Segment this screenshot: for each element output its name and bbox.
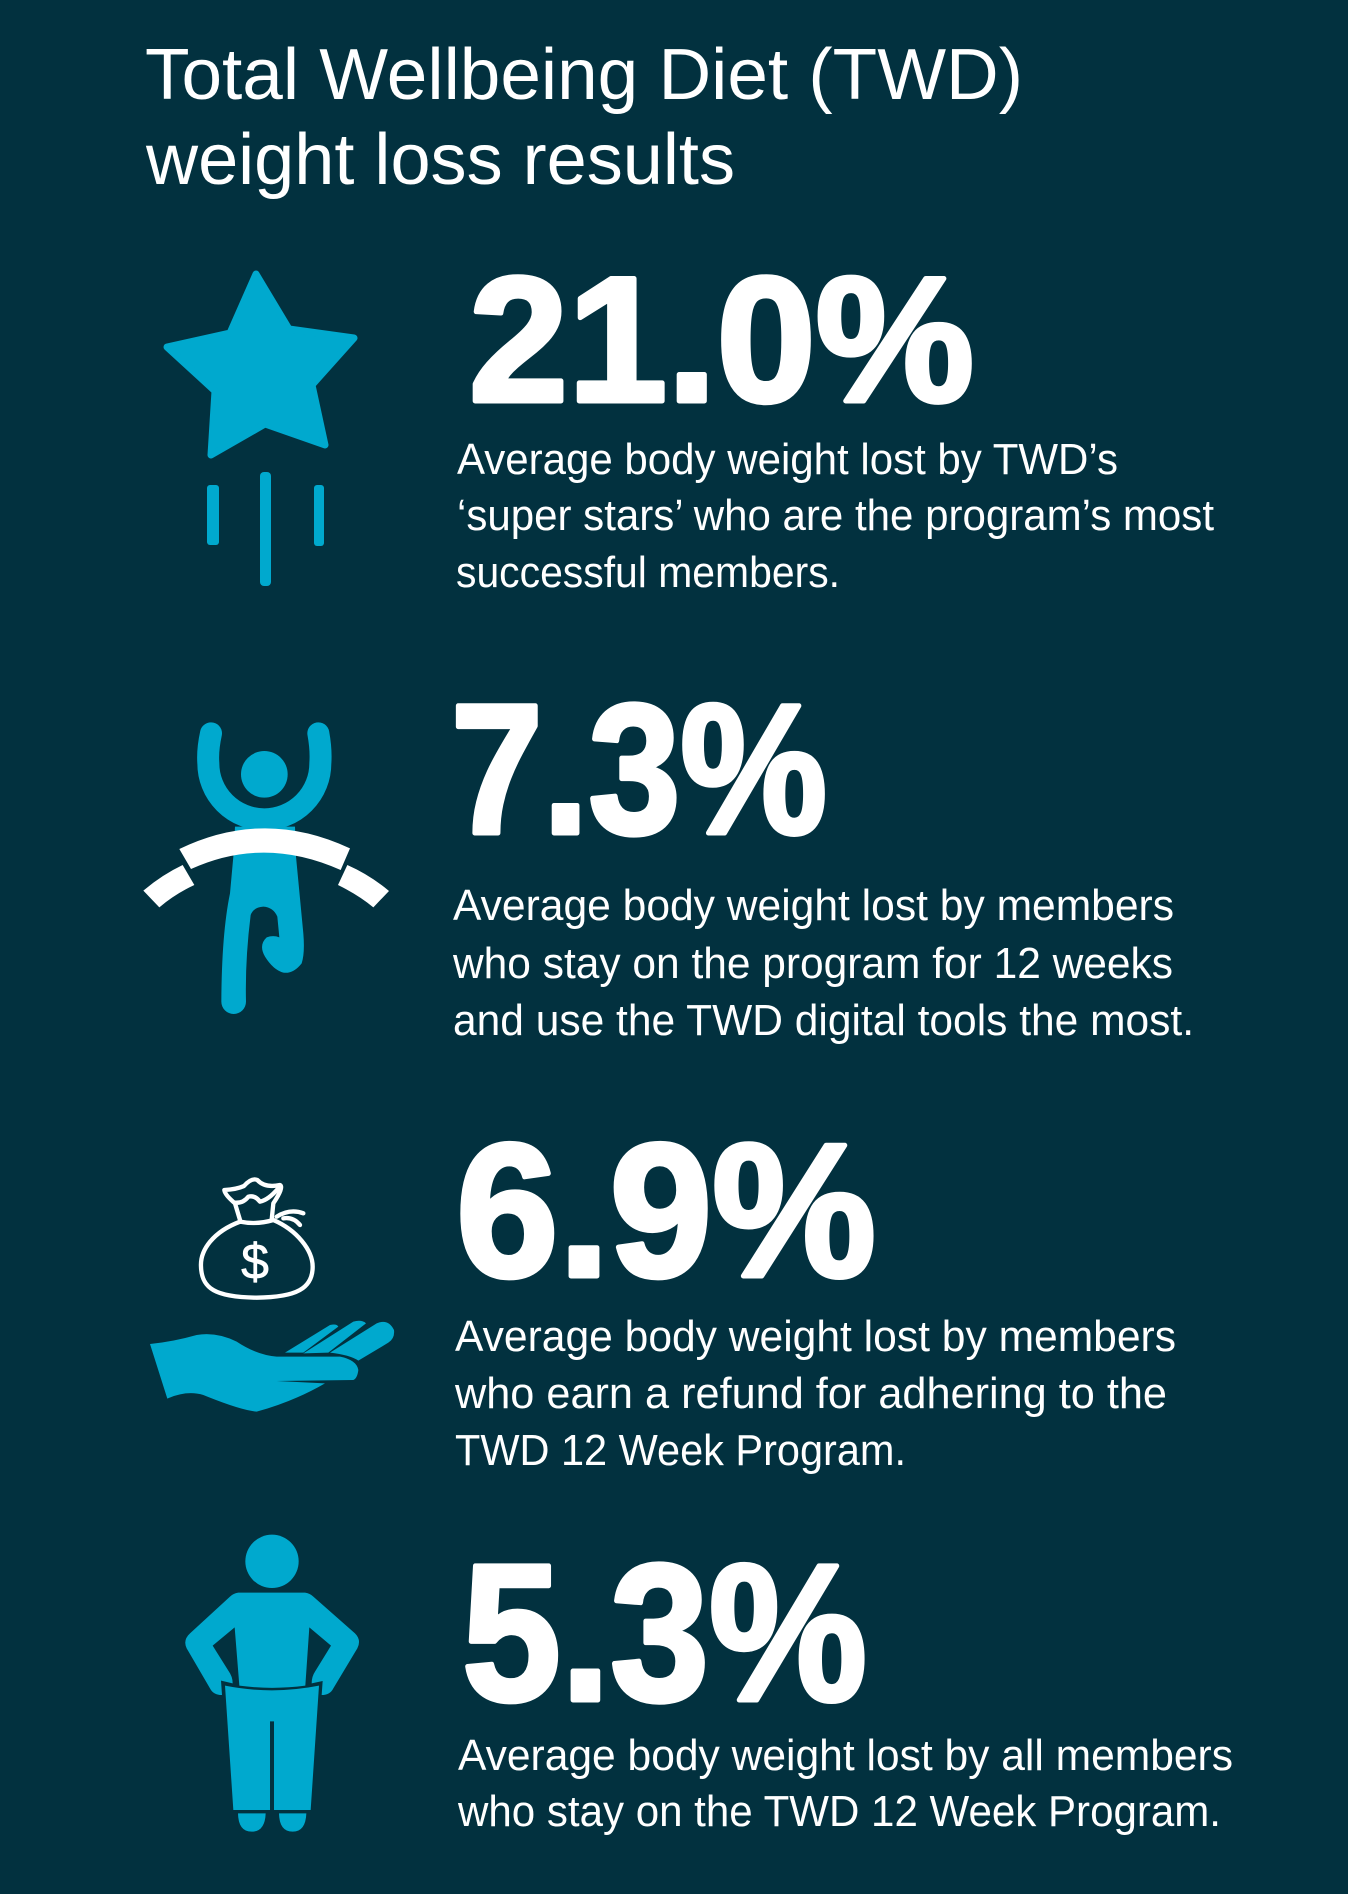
description: refund: TWD 12 Week Program. [455, 1426, 906, 1475]
description: digital tools: Average body weight lost by members [453, 881, 1174, 930]
panel: refund result [150, 1105, 1176, 1475]
icon: money bag over open hand [150, 1179, 394, 1412]
description: super stars [456, 435, 1214, 597]
icon: runner crossing finish line [143, 733, 389, 1014]
icon: shooting star [167, 274, 354, 586]
panel: digital tools result [143, 667, 1194, 1045]
stat: 21.0%: 21.0% [469, 240, 974, 439]
description: super stars: ‘super stars’ who are the program’s most [457, 491, 1214, 540]
description: super stars: Average body weight lost by TWD’s [457, 435, 1118, 484]
icon: person in oversized trousers [185, 1535, 359, 1832]
title: Total Wellbeing Diet (TWD) [145, 35, 1023, 115]
title [145, 35, 1023, 200]
description: refund: Average body weight lost by members [455, 1312, 1176, 1361]
stat: 5.3%: 5.3% [462, 1524, 867, 1742]
description: all members: Average body weight lost by all members [458, 1731, 1233, 1780]
stat: 7.3%: 7.3% [451, 667, 827, 873]
description: all members [457, 1731, 1233, 1836]
icon: open hand [150, 1321, 394, 1412]
icon: money bag [201, 1179, 313, 1298]
description: super stars: successful members. [456, 548, 840, 597]
description: all members: who stay on the TWD 12 Week Program. [457, 1787, 1221, 1836]
panel: all members result [185, 1524, 1233, 1836]
title: weight loss results [145, 120, 735, 200]
description: refund: who earn a refund for adhering to the [454, 1369, 1167, 1418]
stat: 6.9%: 6.9% [456, 1105, 876, 1317]
panel: super stars result [167, 240, 1214, 597]
icon: money bag: $ [241, 1233, 269, 1289]
description: refund [454, 1312, 1176, 1475]
description: digital tools: who stay on the program for 12 weeks [452, 939, 1173, 988]
description: digital tools [452, 881, 1194, 1045]
description: digital tools: and use the TWD digital tools the most. [453, 996, 1194, 1045]
